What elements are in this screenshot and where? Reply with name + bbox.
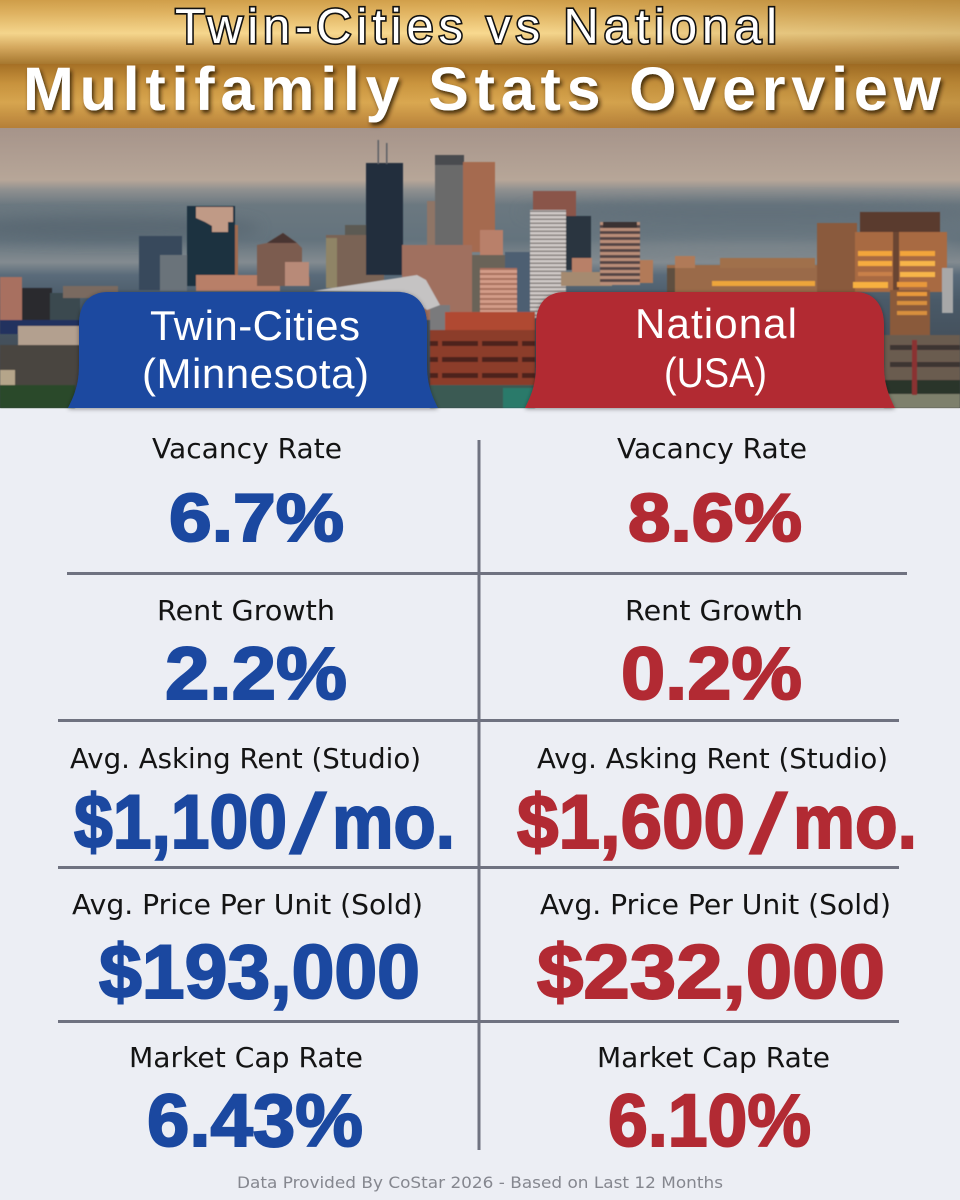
tab: Twin-Cities xyxy=(68,292,438,408)
right stat: price per unit: $232,000 xyxy=(537,930,885,1015)
right stat: rent growth: 0.2% xyxy=(621,632,802,715)
left stat: asking rent: mo. xyxy=(332,780,455,865)
left stat: cap rate xyxy=(129,1041,363,1162)
left stat: cap rate: 6.43% xyxy=(147,1079,363,1162)
right stat: vacancy rate: 8.6% xyxy=(628,480,802,556)
title line 2: Multifamily Stats Overview xyxy=(23,55,942,123)
right low block xyxy=(667,265,817,293)
left stat: price per unit: $193,000 xyxy=(99,930,420,1015)
right stat: asking rent: $1,600 xyxy=(517,780,745,865)
tab: Twin-Cities: (Minnesota) xyxy=(142,350,369,397)
header: gold bands xyxy=(0,0,960,128)
right stat: rent growth xyxy=(621,594,803,715)
right stat: asking rent xyxy=(517,742,917,871)
right stat: cap rate: Market Cap Rate xyxy=(597,1041,830,1074)
right stat: asking rent: / xyxy=(750,777,788,871)
left stat: rent growth: 2.2% xyxy=(165,632,347,715)
right stat: vacancy rate xyxy=(617,432,807,556)
left stat: asking rent: Avg. Asking Rent (Studio) xyxy=(70,742,421,775)
blue-grey towers xyxy=(139,236,182,290)
right stat: price per unit: Avg. Price Per Unit (Sold) xyxy=(540,888,891,921)
left stat: price per unit xyxy=(72,888,423,1015)
tab: National: (USA) xyxy=(664,349,767,396)
mid towers xyxy=(345,225,369,239)
foreground base xyxy=(430,305,450,333)
right stat: vacancy rate: Vacancy Rate xyxy=(617,432,807,465)
right stat: cap rate xyxy=(597,1041,830,1162)
left stat: asking rent: / xyxy=(290,777,327,871)
left stat: vacancy rate xyxy=(152,432,344,556)
right stat: rent growth: Rent Growth xyxy=(625,594,803,627)
left stat: vacancy rate: Vacancy Rate xyxy=(152,432,342,465)
left low rise xyxy=(0,277,22,322)
photo: Minneapolis skyline xyxy=(0,128,960,408)
left stat: cap rate: Market Cap Rate xyxy=(129,1041,363,1074)
left stat: rent growth xyxy=(157,594,347,715)
left stat: asking rent: $1,100 xyxy=(74,780,287,865)
right stat: price per unit xyxy=(537,888,891,1015)
footer source note: Data Provided By CoStar 2026 - Based on Last 12 Months xyxy=(237,1173,723,1192)
left stat: vacancy rate: 6.7% xyxy=(169,480,344,556)
right glowing tower xyxy=(817,223,857,298)
domed tower xyxy=(257,233,310,286)
tab: National: National xyxy=(635,300,797,347)
right stat: asking rent: mo. xyxy=(793,780,917,865)
tab: Twin-Cities: Twin-Cities xyxy=(150,302,360,349)
left stat: rent growth: Rent Growth xyxy=(157,594,335,627)
left stat: asking rent xyxy=(70,742,455,871)
title line 1: Twin-Cities vs National xyxy=(175,0,777,54)
tab: National xyxy=(525,292,895,408)
right stat: asking rent: Avg. Asking Rent (Studio) xyxy=(537,742,888,775)
right stat: cap rate: 6.10% xyxy=(608,1079,811,1162)
left stat: price per unit: Avg. Price Per Unit (Sold) xyxy=(72,888,423,921)
